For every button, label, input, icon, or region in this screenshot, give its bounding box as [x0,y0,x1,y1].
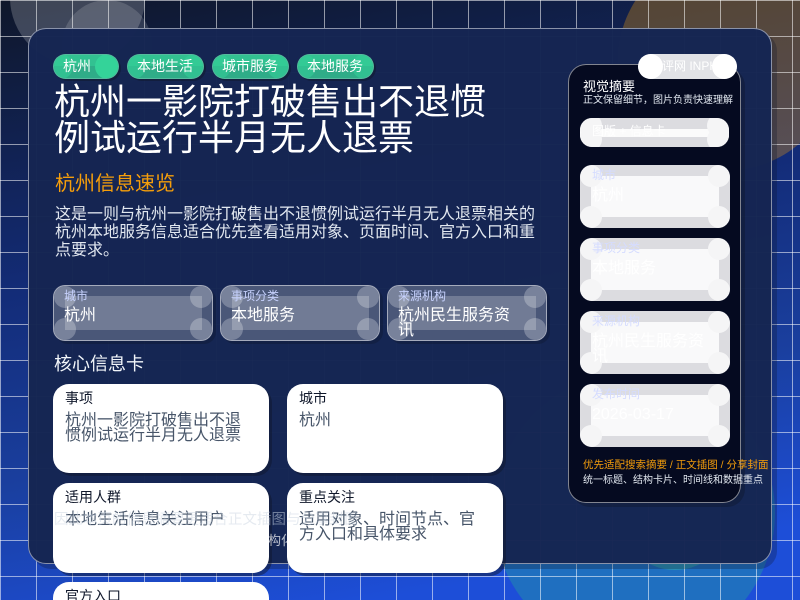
footer ghost text: 因此本页的信息摘要更适合正文插图与分享封面 [54,512,358,528]
side panel [568,64,741,503]
stat card: 来源机构: 杭州民生服务资讯 [398,307,510,339]
stat shadows [59,291,550,344]
side card: 城市: 杭州 [592,187,624,204]
info card: 城市: 城市 [299,390,327,406]
stat card: 城市: 杭州 [64,307,96,324]
footer ghost text [54,511,358,548]
subtitle: 杭州信息速览 [55,173,175,195]
side card: 事项分类: 本地服务 [592,260,656,277]
side card: 来源机构 [580,311,730,374]
info card: 官方入口 [53,582,269,600]
section heading: 核心信息卡 [54,354,144,374]
info card: 事项 [53,384,269,473]
side card: layout note: 图版 + 信息卡 [592,124,666,138]
title [54,81,486,158]
tag row [53,54,376,81]
stat card: 来源机构: 来源机构 [398,289,446,303]
side card: 城市: 城市 [592,168,616,182]
side chip: 新评网 INPHO [650,59,727,73]
side chip [638,54,737,79]
side card: layout note [580,118,729,147]
title: 例试运行半月无人退票 [54,117,414,158]
description: 这是一则与杭州一影院打破售出不退惯例试运行半月无人退票相关的 [55,206,535,223]
side card: 发布时间 [580,384,730,447]
tag: 杭州: 杭州 [63,58,91,74]
info card: 适用人群 [53,483,269,573]
side card: 发布时间: 2026-03-17 [592,406,674,423]
info card: 城市 [287,384,503,473]
side card: 来源机构: 来源机构 [592,314,640,328]
side card: 城市 [580,165,730,228]
side footer: note: 统一标题、结构卡片、时间线和数据重点 [583,475,763,486]
tag: 本地生活: 本地生活 [137,58,193,74]
info card: 适用人群: 适用人群 [65,489,121,505]
side card: 发布时间: 发布时间 [592,387,640,401]
stat card: 来源机构 [387,285,547,341]
stat card: 事项分类: 事项分类 [231,289,279,303]
footer ghost text: 构化 [268,533,294,548]
side card: 来源机构: 杭州民生服务资讯 [592,333,704,365]
info card: 事项: 杭州一影院打破售出不退惯例试运行半月无人退票 [65,412,241,444]
info card: 城市: 杭州 [299,412,331,429]
tag: 本地生活 [127,54,204,79]
tag: 本地服务 [297,54,374,79]
side footer: usage: 优先适配搜索摘要 / 正文插图 / 分享封面 [583,459,769,471]
side subheading: 正文保留细节，图片负责快速理解 [583,95,733,106]
tag: 杭州 [53,54,119,79]
description [55,205,535,259]
info card: 重点关注 [287,483,503,573]
info card: 事项: 事项 [65,390,93,406]
description: 点要求。 [55,242,119,259]
info card: 重点关注: 适用对象、时间节点、官方入口和具体要求 [299,511,475,543]
side card: 事项分类: 事项分类 [592,241,640,255]
tag: 城市服务 [212,54,289,79]
side card: 事项分类 [580,238,730,301]
tag: 城市服务: 城市服务 [222,58,278,74]
stat card: 城市 [53,285,213,341]
tag: 本地服务: 本地服务 [307,58,363,74]
title: 杭州一影院打破售出不退惯 [54,81,486,122]
description: 杭州本地服务信息适合优先查看适用对象、页面时间、官方入口和重 [55,224,535,241]
info card: 适用人群: 本地生活信息关注用户 [65,511,225,528]
stat card: 事项分类 [220,285,380,341]
stat card: 事项分类: 本地服务 [231,307,295,324]
side heading: 视觉摘要 [583,79,635,94]
stat card: 城市: 城市 [64,289,88,303]
info card: 重点关注: 重点关注 [299,489,355,505]
